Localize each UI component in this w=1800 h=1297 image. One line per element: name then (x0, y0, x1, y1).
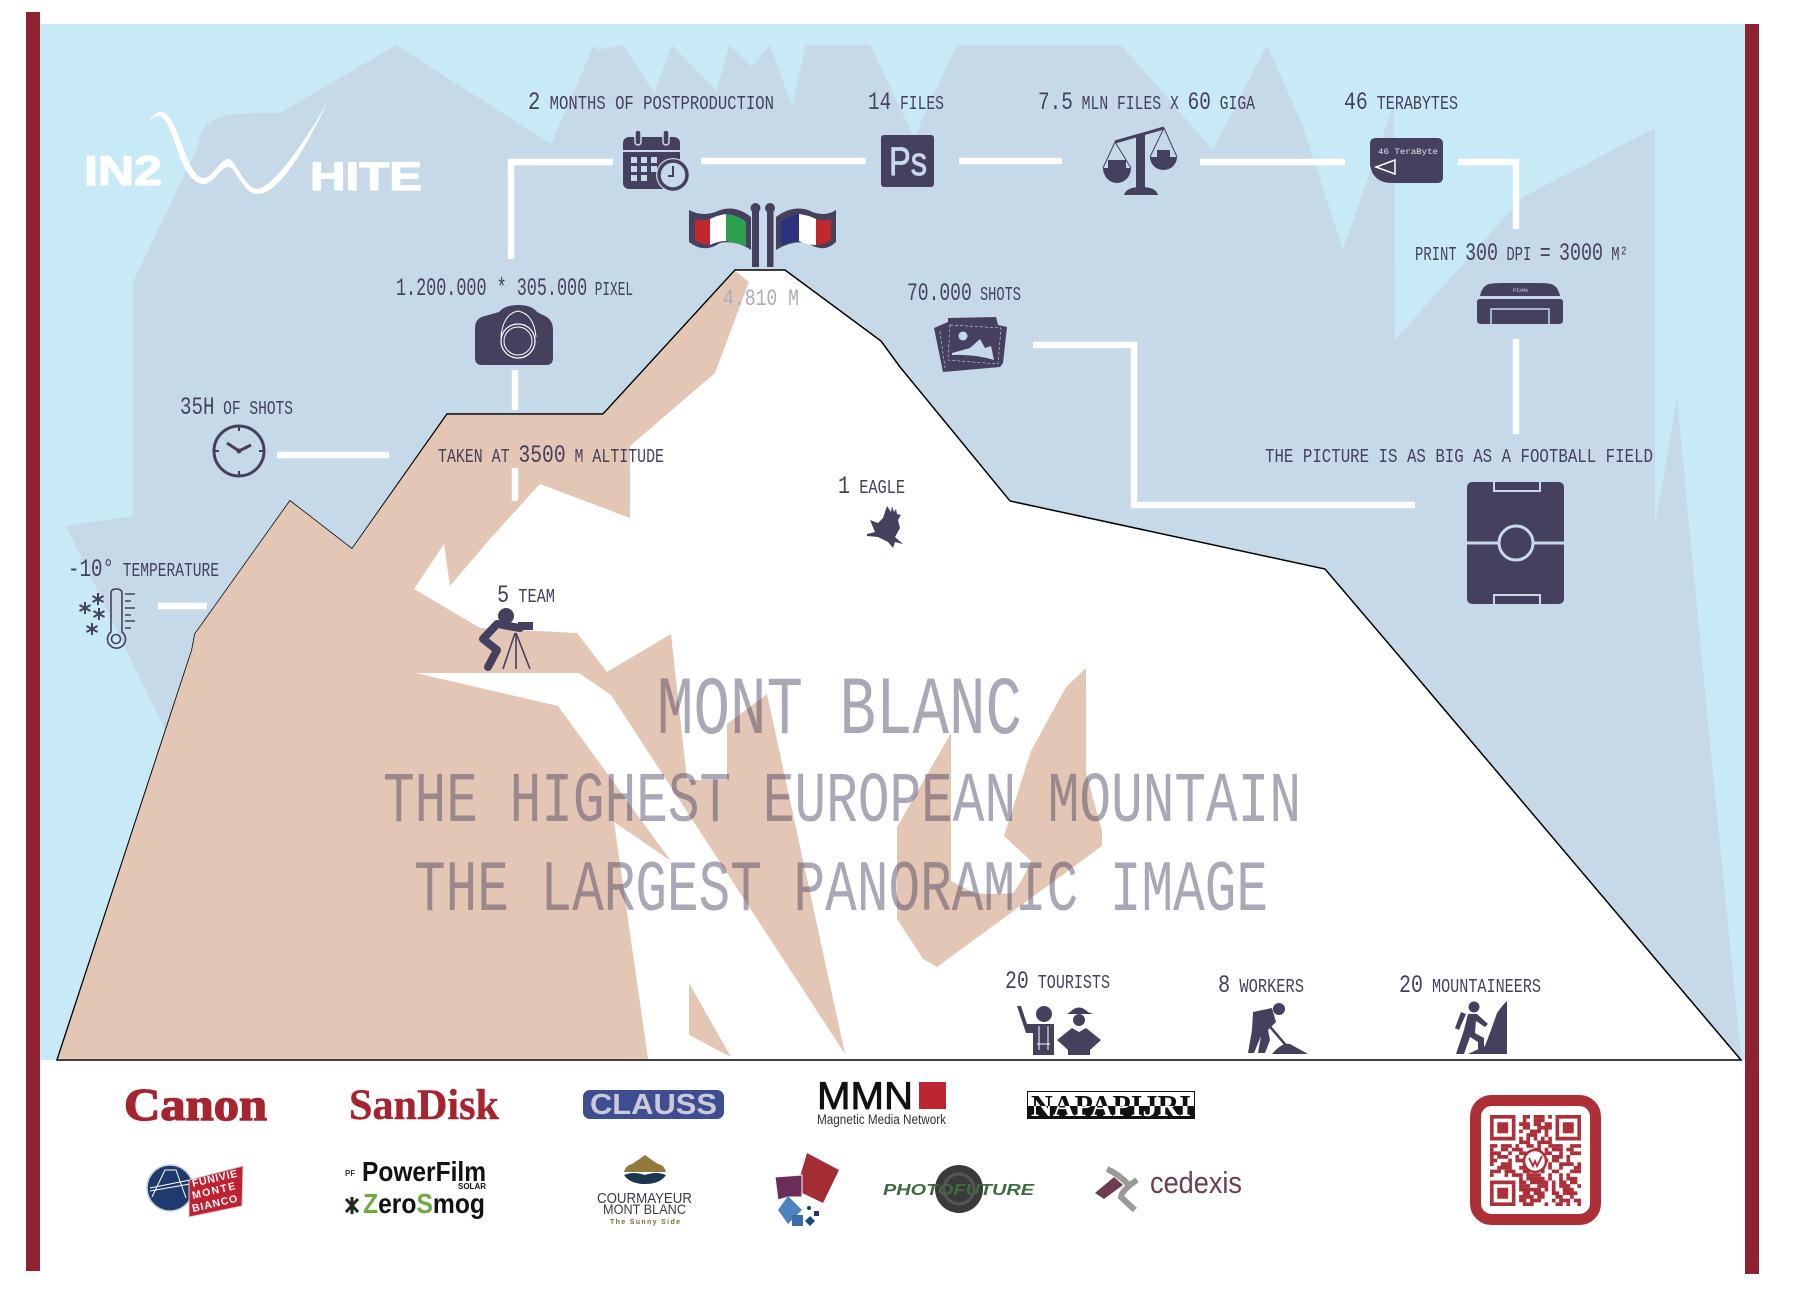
icon: Italian and French flags (689, 203, 836, 267)
logo: In2White: IN2 (84, 147, 162, 194)
connector: calendar to photoshop (701, 158, 866, 164)
label: mountaineers: 20 MOUNTAINEERS (1399, 971, 1541, 1000)
sky background (40, 24, 1745, 1060)
logo: Clauss: CLAUSS (590, 1089, 717, 1121)
logo: Courmayeur Mont Blanc (597, 1155, 692, 1226)
logo: MMN: Magnetic Media Network (817, 1112, 946, 1127)
icon: printer: PIXMA (1513, 288, 1528, 294)
connector: printer to field (1513, 339, 1519, 434)
heading: the largest panoramic image: THE LARGEST PANORAMIC IMAGE (414, 850, 1268, 932)
label: files: 14 FILES (868, 88, 944, 117)
icon: eagle (867, 506, 903, 548)
icon: thermometer and snow (80, 589, 135, 648)
right border bar (1745, 24, 1759, 1274)
label: team: 5 TEAM (497, 581, 555, 610)
logo: PowerFilm Solar: PF (345, 1169, 355, 1178)
icon: photoshop (881, 135, 934, 187)
logo: coloured blocks (775, 1153, 839, 1226)
connector: scale to terabyte (1200, 159, 1345, 165)
label: eagle: 1 EAGLE (838, 472, 905, 501)
mountain rock shadow: right (897, 668, 1102, 967)
label: summit height: 4.810 M (723, 286, 799, 312)
icon: printer (1477, 283, 1563, 324)
label: shots: 70.000 SHOTS (907, 279, 1021, 308)
logo: In2White (84, 103, 422, 199)
label: temperature: -10° TEMPERATURE (68, 555, 219, 584)
QR code (1476, 1100, 1596, 1220)
connector: clock to mountain (277, 452, 389, 458)
icon: photoshop: Ps (889, 140, 927, 184)
logo: Courmayeur Mont Blanc: COURMAYEUR (597, 1190, 692, 1207)
logo: Cedexis (1095, 1165, 1242, 1210)
icon: worker with shovel (1248, 1003, 1308, 1054)
connector: shots to field (1033, 345, 1415, 505)
connector: camera to altitude (512, 370, 518, 410)
connector: thermometer to mountain (158, 603, 207, 609)
logo: MMN (817, 1075, 946, 1127)
icon: photographer with tripod (483, 608, 533, 669)
icon: tourists (1017, 1006, 1101, 1055)
icon: football field (1467, 482, 1564, 604)
logo: Courmayeur Mont Blanc: MONT BLANC (603, 1201, 686, 1217)
icon: balance scale (1103, 128, 1177, 195)
label: altitude: TAKEN AT 3500 M ALTITUDE (438, 441, 664, 470)
label: workers: 8 WORKERS (1218, 971, 1304, 1000)
label: postproduction: 2 MONTHS OF POSTPRODUCTION (528, 88, 774, 117)
label: print: PRINT 300 DPI = 3000 M² (1415, 239, 1628, 268)
mountain (57, 270, 1741, 1060)
logo: Funivie Monte Bianco: MONTE (191, 1180, 237, 1202)
logo: ZeroSmog: ZeroSmog (363, 1188, 485, 1219)
logo: PhotoFuture: PHOTOFUTURE (883, 1182, 1036, 1199)
icon: calendar with clock (623, 130, 690, 192)
label: million files: 7.5 MLN FILES X 60 GIGA (1038, 88, 1255, 117)
connector: photoshop to scale (959, 158, 1062, 164)
label: football field: THE PICTURE IS AS BIG AS A FOOTBALL FIELD (1265, 446, 1653, 468)
left border bar (26, 12, 40, 1271)
logo: Funivie Monte Bianco: FUNIVIE (191, 1168, 238, 1190)
icon: camera (475, 305, 553, 365)
icon: mountaineer (1455, 1001, 1507, 1054)
connector: altitude to team (512, 468, 518, 501)
logo: PhotoFuture (883, 1165, 1036, 1213)
logo: Funivie Monte Bianco: BIANCO (191, 1193, 238, 1215)
label: hours of shots: 35H OF SHOTS (180, 393, 293, 422)
icon: memory card: 46 TeraByte (1378, 148, 1438, 157)
logo: Funivie Monte Bianco (147, 1165, 243, 1217)
mountain rock shadow: main (58, 271, 845, 1059)
logo: PowerFilm Solar: PowerFilm (362, 1156, 486, 1187)
mountain rock shadow: small triangle (689, 983, 731, 1057)
icon: stack of photos (934, 317, 1007, 372)
heading: Mont Blanc: MONT BLANC (657, 664, 1022, 758)
logo: In2White: HITE (310, 155, 422, 199)
logo: MMN: MMN (817, 1075, 913, 1118)
label: pixels: 1.200.000 * 305.000 PIXEL (396, 274, 633, 303)
logo: Courmayeur Mont Blanc: The Sunny Side (610, 1219, 680, 1226)
connector: terabyte to printer (1458, 162, 1516, 229)
label: terabytes: 46 TERABYTES (1344, 88, 1458, 117)
icon: memory card (1370, 138, 1443, 183)
logo: PowerFilm Solar: SOLAR (458, 1182, 486, 1191)
logo: Napapijri: NAPAPIJRI (1031, 1088, 1191, 1123)
distant mountain range (66, 45, 1741, 1060)
label: tourists: 20 TOURISTS (1005, 967, 1110, 996)
logo: SanDisk: SanDisk (349, 1082, 499, 1129)
icon: clock (214, 426, 264, 476)
logo: Napapijri: NAPAPIJRI (1031, 1088, 1191, 1123)
logo: Cedexis: cedexis (1150, 1165, 1242, 1200)
logo: Canon: Canon (124, 1079, 267, 1130)
connector: camera to calendar (511, 162, 613, 259)
heading: the highest European mountain: THE HIGHEST EUROPEAN MOUNTAIN (383, 763, 1301, 843)
